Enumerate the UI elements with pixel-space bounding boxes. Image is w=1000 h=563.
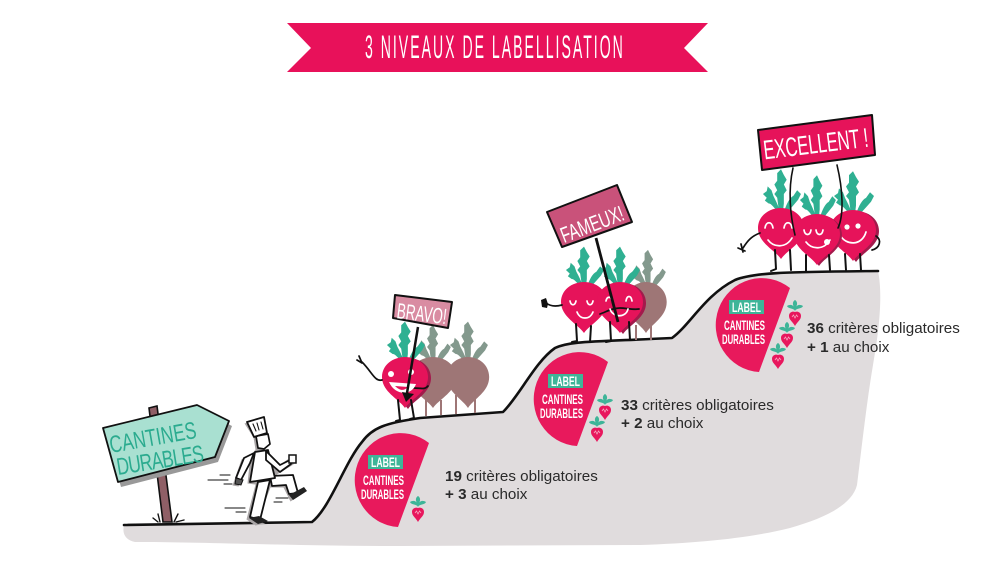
badge: level 1: LABEL (371, 454, 400, 470)
sign shadow (106, 410, 232, 487)
badge name: CANTINES (363, 472, 404, 488)
signpost: cantines durables (103, 405, 232, 522)
text: level 2 criteria: + 2 (621, 415, 643, 432)
text: level 1 criteria: 19 critères obligatoires (445, 468, 598, 485)
front leg (270, 475, 298, 494)
faded radish (410, 325, 456, 416)
text: level 3 criteria: au choix (833, 339, 889, 356)
label tag (368, 455, 403, 469)
pink radish (738, 169, 804, 271)
text: level 2 criteria: 33 critères obligatoires (621, 397, 774, 414)
text: level 3 criteria: 36 critères obligatoires (807, 320, 960, 337)
icon: mini radish (787, 300, 803, 326)
badge: level 2 (534, 352, 608, 446)
chef hat (247, 417, 267, 437)
faded radish (447, 322, 489, 414)
badge name: CANTINES (542, 391, 583, 407)
post (149, 406, 172, 522)
sign panel (103, 405, 229, 482)
badge: level 2: LABEL (551, 373, 580, 389)
badge name: CANTINES (724, 317, 765, 333)
chef shadow (232, 418, 304, 526)
badge: level 1: DURABLES (361, 486, 404, 502)
badge: level 1 (355, 433, 429, 527)
sign text: CANTINES (107, 417, 199, 459)
arms (236, 451, 291, 480)
pink radish (794, 175, 842, 271)
badge: level 3 (716, 278, 790, 372)
fameux text: FAMEUX! (557, 201, 627, 248)
text: level 1 criteria: + 3 (445, 486, 467, 503)
label tag (729, 300, 764, 314)
hill (123, 271, 880, 546)
excellent sign (758, 115, 875, 235)
icon: mini radish (597, 394, 613, 420)
hill outline (124, 271, 878, 525)
jacket (250, 450, 275, 482)
text: level 2 criteria: au choix (647, 415, 703, 432)
icon: mini radish (410, 496, 426, 522)
head (256, 434, 270, 449)
badge: level 3: DURABLES (722, 331, 765, 347)
pink radish (541, 247, 607, 342)
level 2: fameux radishes (541, 185, 667, 342)
back leg (250, 480, 270, 520)
pink radish (830, 171, 879, 270)
pink radish (597, 247, 646, 342)
level 3: excellent radishes (738, 115, 879, 271)
badge: level 2: DURABLES (540, 405, 583, 421)
text: level 1 criteria: au choix (471, 486, 527, 503)
icon: mini radish (770, 343, 786, 369)
sign text: DURABLES (115, 441, 206, 481)
icon: mini radish (779, 322, 795, 348)
chef (208, 417, 307, 526)
excellent text: EXCELLENT ! (762, 123, 870, 165)
title banner (287, 23, 708, 72)
speed lines (208, 475, 288, 512)
title text: 3 NIVEAUX DE LABELLISATION (365, 31, 623, 66)
icon: mini radish (589, 416, 605, 442)
bravo text: BRAVO! (395, 298, 448, 329)
sign text (107, 417, 206, 481)
badge: level 3: LABEL (732, 299, 761, 315)
level 1: bravo radishes (357, 295, 489, 421)
pink radish (357, 322, 431, 421)
label tag (548, 374, 583, 388)
cup (289, 455, 296, 463)
fameux sign (547, 185, 632, 322)
faded radish (625, 250, 667, 340)
text: level 3 criteria: + 1 (807, 339, 829, 356)
